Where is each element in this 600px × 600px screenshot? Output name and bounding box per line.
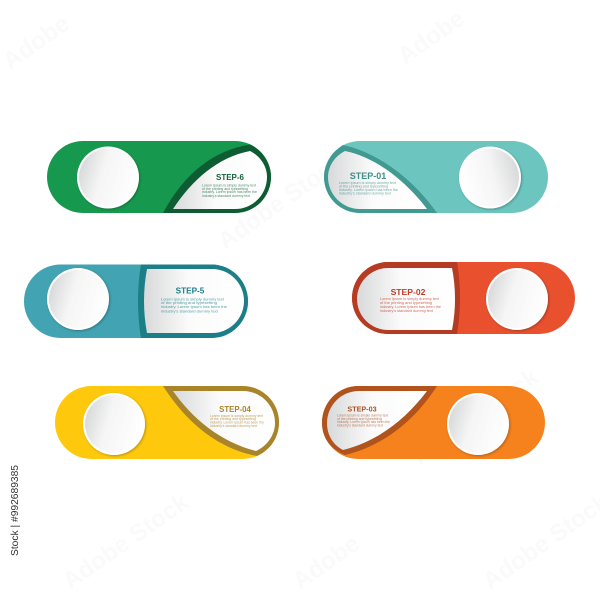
- body text: of the printing and typesetting: [202, 187, 248, 191]
- tab: [327, 391, 427, 450]
- stock id label: Stock | #992689385: [10, 465, 21, 556]
- tab border: [163, 144, 271, 213]
- heading: STEP-03: [347, 404, 377, 414]
- pill body: [322, 386, 545, 459]
- pill body: [47, 141, 271, 213]
- tab: [173, 391, 275, 451]
- body text: industry. Lorem Ipsum has been the: [161, 305, 227, 309]
- body text: industry. Lorem Ipsum has been the: [380, 305, 441, 309]
- body text: Lorem Ipsum is simply dummy text: [337, 413, 388, 417]
- tab border: [163, 386, 279, 456]
- tab border: [352, 262, 460, 334]
- watermark pattern: Adobe: [288, 530, 365, 595]
- body text: [337, 413, 390, 428]
- body text: Lorem Ipsum is simply dummy text: [380, 297, 439, 301]
- body text: of the printing and typesetting: [210, 417, 256, 421]
- heading: STEP-04: [219, 405, 251, 414]
- body text: industry's standard dummy text: [202, 194, 250, 198]
- body text: [210, 414, 264, 428]
- pill body: [24, 264, 248, 338]
- body text: industry's standard dummy text: [339, 192, 391, 196]
- watermark pattern: Adobe Stock: [408, 363, 544, 470]
- tab: [328, 151, 427, 209]
- heading: STEP-5: [176, 286, 205, 296]
- heading: STEP-02: [391, 287, 426, 297]
- body text: [380, 297, 441, 313]
- body text: Lorem Ipsum is simply dummy text: [161, 298, 224, 302]
- tab: [173, 151, 267, 209]
- tab: [144, 269, 244, 333]
- body text: industry. Lorem Ipsum has been the: [210, 420, 264, 424]
- body text: industry's standard dummy text: [337, 424, 383, 428]
- body text: industry. Lorem Ipsum has been the: [337, 420, 390, 424]
- panel: step 03 orange: [322, 386, 545, 459]
- body text: of the printing and typesetting: [380, 301, 432, 305]
- body text: of the printing and typesetting: [337, 417, 382, 421]
- body text: of the printing and typesetting: [161, 301, 217, 305]
- circle: [447, 393, 509, 455]
- panel: step 01 teal: [324, 141, 548, 213]
- watermark pattern: Adobe Stock: [213, 148, 349, 255]
- body text: [202, 184, 257, 198]
- watermark pattern: Adobe: [393, 5, 470, 70]
- body text: industry. Lorem Ipsum has been the: [339, 188, 398, 192]
- body text: Lorem Ipsum is simply dummy text: [202, 184, 256, 188]
- pill body: [352, 262, 575, 334]
- body text: industry's standard dummy text: [380, 309, 433, 313]
- body text: industry's standard dummy text: [210, 424, 257, 428]
- tab border: [324, 145, 437, 213]
- body text: industry's standard dummy text: [161, 310, 218, 314]
- body text: of the printing and typesetting: [339, 184, 388, 188]
- watermark pattern: Adobe: [0, 10, 75, 75]
- watermark pattern: Adobe Stock: [58, 488, 194, 595]
- body text: [161, 298, 227, 314]
- body text: industry. Lorem Ipsum has been the: [202, 190, 257, 194]
- panel: step 5 blue: [24, 264, 248, 338]
- panel: step 04 yellow: [55, 386, 279, 459]
- pill body: [324, 141, 548, 213]
- tab border: [138, 264, 248, 338]
- body text: Lorem Ipsum is simply dummy text: [210, 414, 263, 418]
- heading: STEP-6: [216, 173, 245, 182]
- panel: step 02 red: [352, 262, 575, 334]
- body text: [339, 181, 398, 196]
- circle: [459, 146, 521, 208]
- circle: [486, 268, 548, 330]
- heading: STEP-01: [350, 171, 386, 181]
- circle: [83, 393, 145, 455]
- circle: [47, 268, 109, 330]
- circle: [77, 146, 139, 208]
- body text: Lorem Ipsum is simply dummy text: [339, 181, 396, 185]
- pill body: [55, 386, 279, 459]
- tab border: [322, 386, 437, 455]
- tab: [357, 268, 455, 330]
- panel: step 6 green: [47, 141, 271, 213]
